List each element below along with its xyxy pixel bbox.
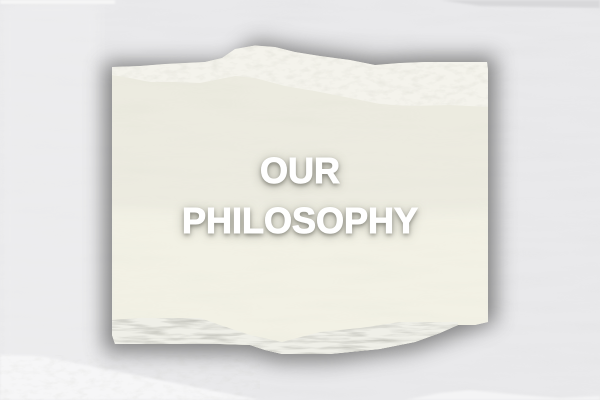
title: PHILOSOPHY	[182, 200, 418, 241]
paper shadow	[104, 40, 496, 362]
bottom torn edge	[112, 318, 458, 354]
title: OUR	[260, 150, 340, 191]
title	[178, 150, 421, 241]
torn paper sheet	[105, 40, 495, 360]
top torn edge	[112, 46, 488, 106]
